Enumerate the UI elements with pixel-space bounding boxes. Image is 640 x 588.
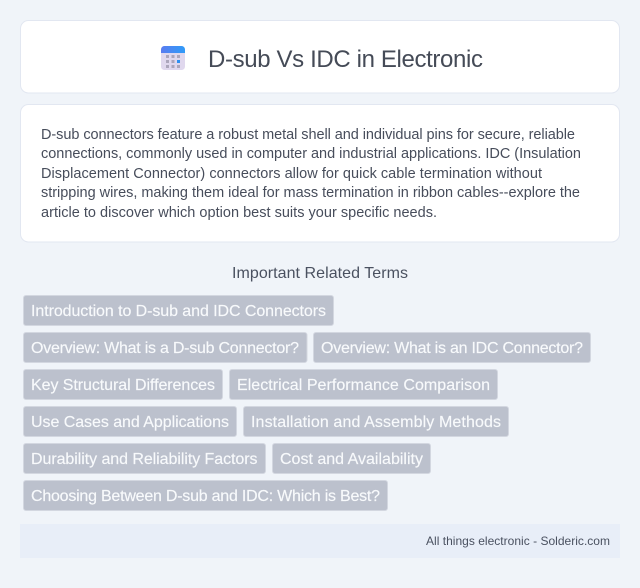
tag <box>24 296 334 326</box>
tag <box>230 370 498 400</box>
footer <box>20 524 620 558</box>
tag <box>272 444 430 474</box>
heading: related terms: Important Related Terms <box>232 265 408 282</box>
tag: Key Structural Differences <box>31 377 215 394</box>
tag: Use Cases and Applications <box>31 414 229 431</box>
tag: Choosing Between D-sub and IDC: Which is Best? <box>31 488 380 505</box>
tag <box>24 370 222 400</box>
description text: stripping wires, making them ideal for mass termination in ribbon cables--explore the <box>41 185 580 201</box>
header panel <box>20 20 620 93</box>
icon: calendar grid <box>161 46 185 70</box>
tag: Installation and Assembly Methods <box>251 414 501 431</box>
footer text: All things electronic - Solderic.com <box>426 534 610 548</box>
panel: description <box>20 104 620 242</box>
description text: article to discover which option best suits your specific needs. <box>41 205 437 221</box>
tag: Introduction to D-sub and IDC Connectors <box>31 303 326 320</box>
tag <box>24 480 388 510</box>
description text: Displacement Connector) connectors allow for quick cable termination without <box>41 166 542 182</box>
description text <box>41 127 581 221</box>
term tags <box>24 296 590 510</box>
tag: Electrical Performance Comparison <box>237 377 490 394</box>
tag <box>314 332 590 362</box>
description text: connections, commonly used in computer and industrial applications. IDC (Insulation <box>41 146 581 162</box>
tag <box>24 444 266 474</box>
tag: Cost and Availability <box>280 451 423 468</box>
tag <box>244 406 508 436</box>
title: D-sub Vs IDC in Electronic <box>208 46 483 73</box>
tag: Durability and Reliability Factors <box>31 451 258 468</box>
description text: D-sub connectors feature a robust metal shell and individual pins for secure, reliable <box>41 127 575 143</box>
tag: Overview: What is an IDC Connector? <box>321 340 583 357</box>
tag: Overview: What is a D-sub Connector? <box>31 340 299 357</box>
tag <box>24 332 307 362</box>
tag <box>24 406 236 436</box>
